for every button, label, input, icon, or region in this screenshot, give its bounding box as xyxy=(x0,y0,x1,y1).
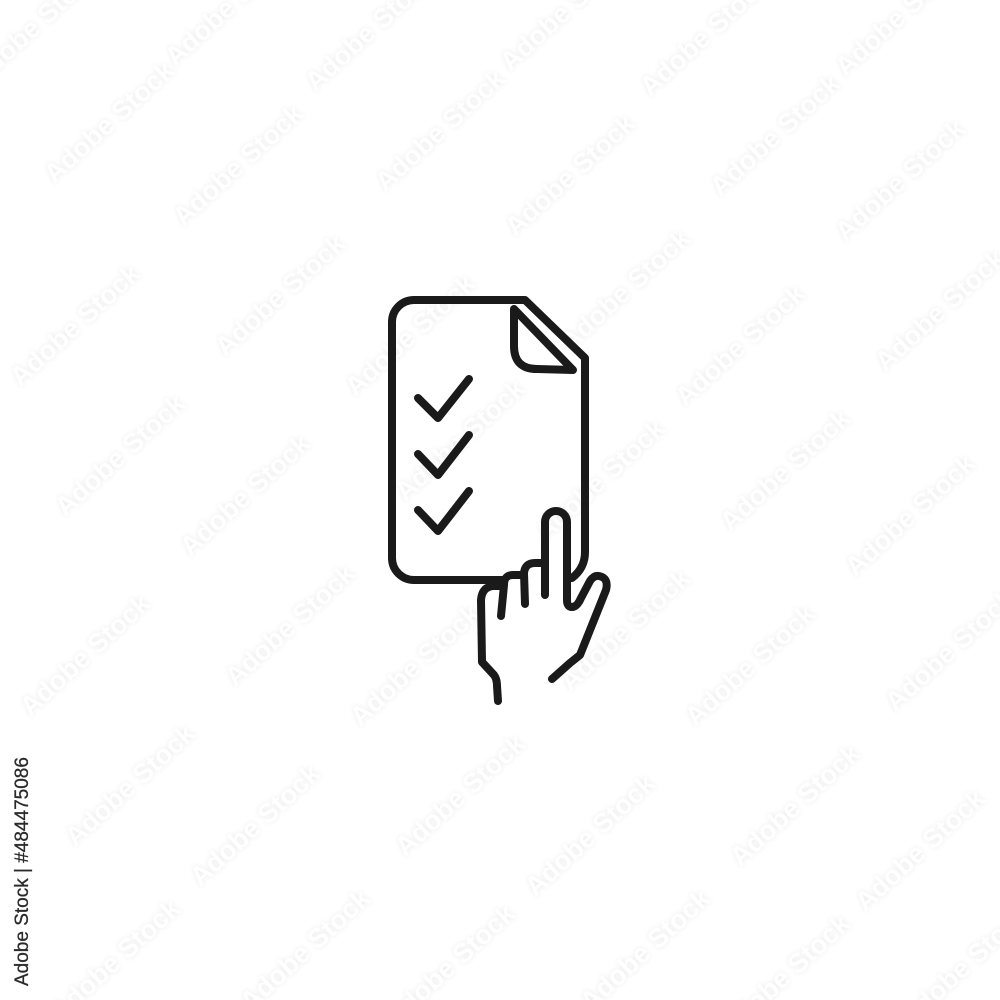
watermark pattern: Adobe Stock xyxy=(389,728,532,862)
watermark pattern: Adobe Stock xyxy=(174,428,317,562)
watermark pattern: Adobe Stock xyxy=(529,413,672,547)
watermark pattern: Adobe Stock xyxy=(4,258,147,392)
watermark pattern: Adobe Stock xyxy=(38,55,181,189)
icon: check mark 3 xyxy=(418,491,469,531)
icon: check mark 1 xyxy=(418,379,469,418)
watermark pattern: Adobe Stock xyxy=(184,758,327,892)
watermark pattern: Adobe Stock xyxy=(369,63,512,197)
watermark pattern: Adobe Stock xyxy=(389,373,532,507)
icon: pointing hand xyxy=(481,511,607,701)
watermark pattern: Adobe Stock xyxy=(339,268,482,402)
watermark pattern: Adobe Stock xyxy=(704,68,847,202)
icon: folded page corner xyxy=(514,309,573,370)
watermark pattern: Adobe Stock xyxy=(679,598,822,732)
watermark pattern: Adobe Stock xyxy=(344,598,487,732)
icon: document outline xyxy=(392,300,585,580)
watermark pattern: Adobe Stock xyxy=(849,783,992,917)
watermark pattern: Adobe Stock xyxy=(167,98,310,232)
watermark pattern: Adobe Stock xyxy=(554,223,697,357)
watermark pattern: Adobe Stock xyxy=(219,558,362,692)
watermark pattern: Adobe Stock xyxy=(839,448,982,582)
watermark pattern: Adobe Stock xyxy=(49,388,192,522)
watermark pattern: Adobe Stock xyxy=(554,563,697,697)
watermark pattern: Adobe Stock xyxy=(829,113,972,247)
watermark pattern: Adobe Stock xyxy=(669,278,812,412)
watermark pattern: Adobe Stock xyxy=(714,403,857,537)
watermark pattern: Adobe Stock xyxy=(499,108,642,242)
watermark pattern: Adobe Stock xyxy=(724,738,867,872)
stock id label: Adobe Stock | #484475086 xyxy=(12,757,33,986)
watermark pattern: Adobe Stock xyxy=(14,588,157,722)
watermark pattern: Adobe Stock xyxy=(209,228,352,362)
icon: check mark 2 xyxy=(418,435,469,475)
icon: checklist document with pointing hand xyxy=(392,300,607,701)
watermark pattern: Adobe Stock xyxy=(59,718,202,852)
watermark pattern: Adobe Stock xyxy=(519,768,662,902)
